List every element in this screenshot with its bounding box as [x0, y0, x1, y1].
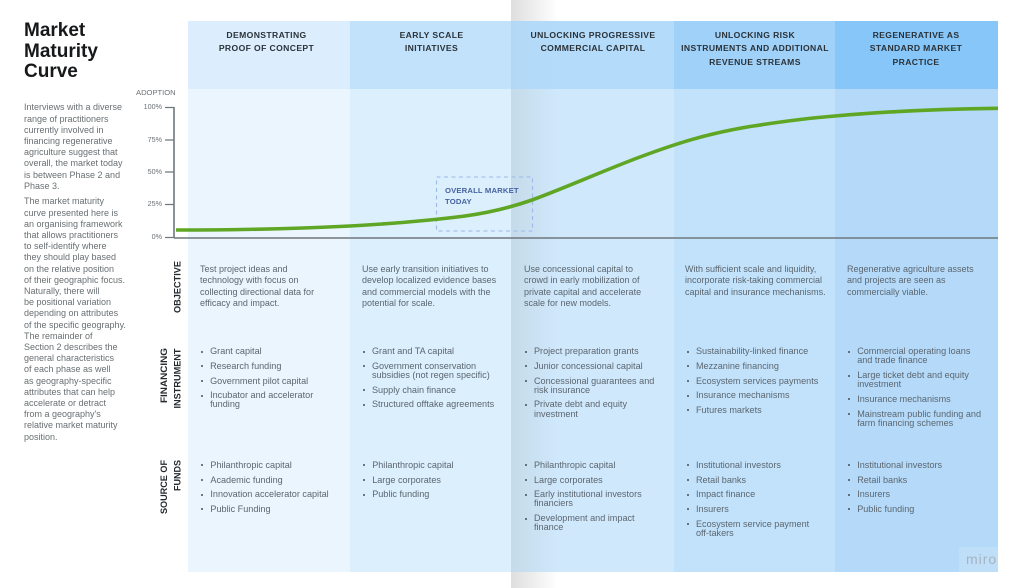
- objective: phase 2: develop localized evidence bases: [362, 275, 496, 285]
- title: [24, 20, 98, 82]
- header: phase 4: INSTRUMENTS AND ADDITIONAL: [681, 43, 829, 53]
- axis tick labels: 75%: [148, 135, 162, 144]
- source of funds: phase 1: [201, 460, 329, 514]
- financing instruments: phase 3: risk insurance: [534, 385, 590, 395]
- financing instruments: phase 3: investment: [534, 409, 578, 419]
- page fold margins: [511, 0, 558, 588]
- chart axes: [165, 107, 998, 238]
- objective: phase 2: Use early transition initiatives to: [362, 264, 489, 274]
- row label: objective: OBJECTIVE: [172, 261, 182, 313]
- row label: source of funds: FUNDS: [172, 460, 182, 491]
- source of funds: phase 1: Philanthropic capital: [210, 460, 292, 470]
- header: phase 3: UNLOCKING PROGRESSIVE: [531, 30, 655, 40]
- source of funds: phase 3: Philanthropic capital: [534, 460, 615, 470]
- source of funds: phase 3: finance: [534, 522, 563, 532]
- financing instruments: phase 4: Futures markets: [696, 405, 762, 415]
- intro paragraph 2: as geography-specific: [24, 376, 112, 386]
- source of funds: phase 4: Impact finance: [696, 489, 755, 499]
- header: phase 1: PROOF OF CONCEPT: [219, 43, 314, 53]
- financing instruments: phase 1: [201, 346, 314, 409]
- header: phase 2: INITIATIVES: [405, 43, 458, 53]
- callout: overall market today: OVERALL MARKET: [445, 186, 519, 195]
- source of funds: phase 1: Innovation accelerator capital: [210, 489, 329, 499]
- financing instruments: phase 2: Structured offtake agreements: [372, 399, 494, 409]
- intro paragraph 2: an organising framework: [24, 219, 123, 229]
- financing instruments: phase 3: [525, 346, 654, 419]
- objective: phase 2: potential for scale.: [362, 298, 435, 308]
- objective: phase 3: Use concessional capital to: [524, 264, 633, 274]
- objective: phase 5: and projects are seen as: [847, 275, 946, 285]
- source of funds: phase 3: Large corporates: [534, 474, 603, 484]
- objective: phase 3: [524, 264, 641, 308]
- financing instruments: phase 4: [687, 346, 818, 415]
- header: phase 4: UNLOCKING RISK: [715, 30, 795, 40]
- financing instruments: phase 2: subsidies (not regen specific): [372, 370, 490, 380]
- page fold shading: [511, 21, 558, 572]
- financing instruments: phase 2: Grant and TA capital: [372, 346, 454, 356]
- phase header backgrounds: [188, 21, 998, 89]
- financing instruments: phase 2: [363, 346, 494, 409]
- objective: phase 1: technology with focus on: [200, 275, 299, 285]
- objective: phase 5: [847, 264, 974, 297]
- intro paragraph 2: of the specific geography.: [24, 320, 126, 330]
- objective: phase 3: crowd in early mobilization of: [524, 275, 640, 285]
- header: phase 3: COMMERCIAL CAPITAL: [541, 43, 645, 53]
- objective: phase 4: incorporate risk-taking commercial: [685, 275, 822, 285]
- source of funds: phase 4: Institutional investors: [696, 460, 781, 470]
- axis tick labels: 100%: [144, 102, 162, 111]
- source of funds: phase 5: Retail banks: [857, 474, 907, 484]
- source of funds: phase 4: off-takers: [696, 528, 734, 538]
- intro paragraph 2: from a geography's: [24, 409, 101, 419]
- financing instruments: phase 4: Mezzanine financing: [696, 361, 779, 371]
- intro paragraph 2: general characteristics: [24, 353, 114, 363]
- intro paragraph 1: Interviews with a diverse: [24, 102, 122, 112]
- financing instruments: phase 5: Mainstream public funding and: [857, 409, 981, 419]
- intro paragraph 2: be positional variation: [24, 297, 111, 307]
- objective: phase 5: commercially viable.: [847, 287, 928, 297]
- source of funds: phase 1: Public Funding: [210, 504, 271, 514]
- financing instruments: phase 5: Insurance mechanisms: [857, 394, 951, 404]
- intro paragraph 2: of their geographic focus.: [24, 275, 125, 285]
- intro paragraph 2: that allows practitioners: [24, 230, 118, 240]
- intro paragraph 1: [24, 102, 123, 191]
- source of funds: phase 2: [363, 460, 454, 499]
- source of funds: phase 1: Academic funding: [210, 474, 283, 484]
- objective: phase 4: capital and insurance mechanisms.: [685, 287, 826, 297]
- financing instruments: phase 4: Ecosystem services payments: [696, 376, 818, 386]
- financing instruments: phase 5: farm financing schemes: [857, 418, 953, 428]
- financing instruments: phase 1: funding: [210, 399, 240, 409]
- financing instruments: phase 3: Private debt and equity: [534, 399, 627, 409]
- header: phase 4: [681, 30, 829, 67]
- source of funds: phase 2: Large corporates: [372, 474, 441, 484]
- intro paragraph 2: [24, 196, 126, 442]
- header: phase 5: REGENERATIVE AS: [873, 30, 959, 40]
- row label: financing instrument: INSTRUMENT: [172, 348, 182, 408]
- objective: phase 1: [200, 264, 314, 308]
- title: Maturity: [24, 41, 98, 62]
- financing instruments: phase 5: investment: [857, 379, 901, 389]
- axis tick labels: 50%: [148, 167, 162, 176]
- intro paragraph 2: on the relative position: [24, 264, 114, 274]
- objective: phase 4: With sufficient scale and liquidity,: [685, 264, 816, 274]
- objective: phase 3: scale for new models.: [524, 298, 611, 308]
- intro paragraph 1: overall, the market today: [24, 158, 123, 168]
- header: phase 2: [400, 30, 463, 53]
- axis tick labels: 25%: [148, 199, 162, 208]
- intro paragraph 2: Naturally, there will: [24, 286, 99, 296]
- header: phase 5: STANDARD MARKET: [870, 43, 962, 53]
- intro paragraph 1: currently involved in: [24, 125, 104, 135]
- financing instruments: phase 1: Incubator and accelerator: [210, 390, 313, 400]
- intro paragraph 1: is between Phase 2 and: [24, 170, 120, 180]
- financing instruments: phase 1: Grant capital: [210, 346, 262, 356]
- objective: phase 2: [362, 264, 496, 308]
- financing instruments: phase 3: Junior concessional capital: [534, 361, 643, 371]
- header: phase 2: EARLY SCALE: [400, 30, 463, 40]
- watermark: miro: [959, 547, 1000, 572]
- objective: phase 3: private capital and accelerate: [524, 287, 641, 297]
- header: phase 5: [870, 30, 962, 67]
- objective: phase 2: and commercial models with the: [362, 287, 491, 297]
- intro paragraph 2: to self-identify where: [24, 241, 107, 251]
- intro paragraph 2: Section 2 describes the: [24, 342, 118, 352]
- source of funds: phase 2: Philanthropic capital: [372, 460, 454, 470]
- intro paragraph 1: Phase 3.: [24, 181, 60, 191]
- source of funds: phase 4: [687, 460, 810, 538]
- intro paragraph 2: attributes that can help: [24, 387, 115, 397]
- source of funds: phase 5: Institutional investors: [857, 460, 942, 470]
- source of funds: phase 5: Public funding: [857, 504, 914, 514]
- financing instruments: phase 1: Government pilot capital: [210, 376, 308, 386]
- financing instruments: phase 5: [848, 346, 981, 428]
- source of funds: phase 3: Early institutional investors: [534, 489, 642, 499]
- objective: phase 4: [685, 264, 826, 297]
- financing instruments: phase 1: Research funding: [210, 361, 281, 371]
- intro paragraph 2: accelerate or detract: [24, 398, 106, 408]
- objective: phase 1: efficacy and impact.: [200, 298, 279, 308]
- phase column backgrounds: [188, 89, 998, 572]
- header: phase 1: DEMONSTRATING: [226, 30, 307, 40]
- source of funds: phase 3: financiers: [534, 498, 573, 508]
- financing instruments: phase 5: Commercial operating loans: [857, 346, 970, 356]
- intro paragraph 1: financing regenerative: [24, 136, 113, 146]
- callout: overall market today: [445, 186, 519, 206]
- financing instruments: phase 2: Government conservation: [372, 361, 476, 371]
- row label: financing instrument: FINANCING: [159, 348, 169, 403]
- source of funds: phase 2: Public funding: [372, 489, 429, 499]
- intro paragraph 2: of each phase as well: [24, 364, 111, 374]
- callout: overall market today: TODAY: [445, 197, 472, 206]
- source of funds: phase 4: Ecosystem service payment: [696, 519, 809, 529]
- financing instruments: phase 3: Project preparation grants: [534, 346, 639, 356]
- dashed box: overall market today: [436, 177, 532, 231]
- title: Market: [24, 20, 85, 41]
- axis tick labels: 0%: [152, 232, 162, 241]
- objective: phase 1: collecting directional data for: [200, 287, 314, 297]
- intro paragraph 2: The remainder of: [24, 331, 93, 341]
- financing instruments: phase 5: Large ticket debt and equity: [857, 370, 969, 380]
- header: phase 1: [219, 30, 314, 53]
- title: Curve: [24, 61, 78, 82]
- axis title: ADOPTION: [136, 88, 176, 97]
- adoption curve: [176, 108, 998, 230]
- source of funds: phase 5: [848, 460, 942, 514]
- row label: financing instrument: [159, 348, 182, 408]
- source of funds: phase 4: Retail banks: [696, 474, 746, 484]
- header: phase 3: [531, 30, 655, 53]
- intro paragraph 2: relative market maturity: [24, 420, 118, 430]
- source of funds: phase 4: Insurers: [696, 504, 729, 514]
- objective: phase 1: Test project ideas and: [200, 264, 288, 274]
- source of funds: phase 3: [525, 460, 642, 532]
- financing instruments: phase 4: Insurance mechanisms: [696, 390, 790, 400]
- row label: source of funds: [159, 460, 182, 514]
- intro paragraph 1: range of practitioners: [24, 114, 109, 124]
- axis tick labels: [144, 102, 162, 241]
- intro paragraph 1: agriculture suggest that: [24, 147, 118, 157]
- objective: phase 5: Regenerative agriculture assets: [847, 264, 974, 274]
- financing instruments: phase 5: and trade finance: [857, 355, 927, 365]
- financing instruments: phase 4: Sustainability-linked finance: [696, 346, 808, 356]
- intro paragraph 2: depending on attributes: [24, 308, 118, 318]
- watermark: miro: miro: [966, 551, 997, 567]
- financing instruments: phase 2: Supply chain finance: [372, 385, 456, 395]
- row label: source of funds: SOURCE OF: [159, 460, 169, 514]
- source of funds: phase 5: Insurers: [857, 489, 890, 499]
- intro paragraph 2: position.: [24, 432, 58, 442]
- intro paragraph 2: curve presented here is: [24, 208, 118, 218]
- intro paragraph 2: they should play based: [24, 252, 116, 262]
- header: phase 5: PRACTICE: [893, 57, 939, 67]
- financing instruments: phase 3: Concessional guarantees and: [534, 376, 654, 386]
- source of funds: phase 3: Development and impact: [534, 513, 635, 523]
- intro paragraph 2: The market maturity: [24, 196, 104, 206]
- header: phase 4: REVENUE STREAMS: [709, 57, 801, 67]
